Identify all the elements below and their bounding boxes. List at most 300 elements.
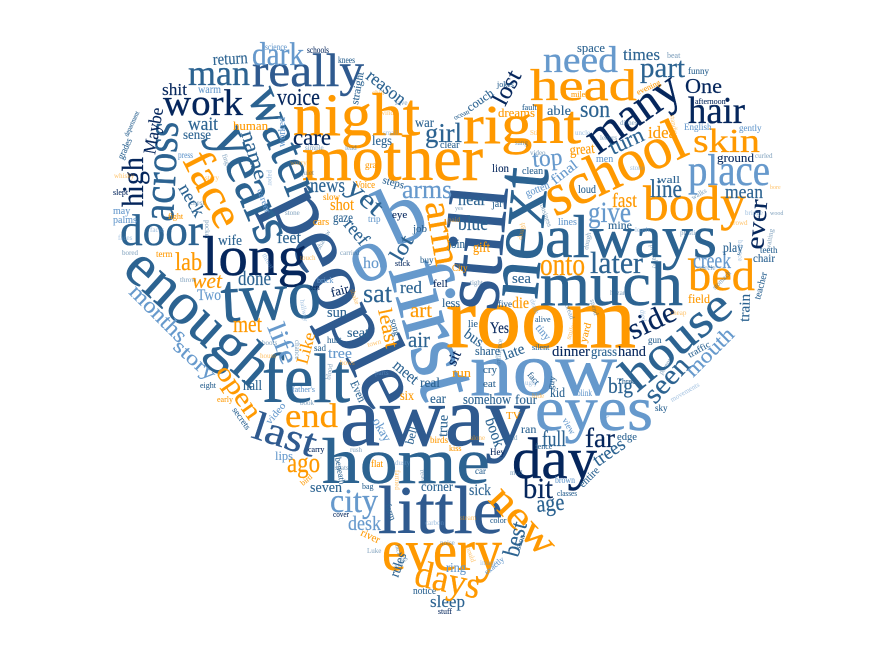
medium words: upper right: jokes <box>496 80 514 89</box>
medium words: upper right: play <box>723 241 743 256</box>
medium words: lower right: tiny <box>533 322 553 343</box>
medium words: lower right: exactly <box>483 555 506 577</box>
medium words: lower right: eat <box>483 378 496 390</box>
medium words: upper left: man <box>188 53 250 93</box>
small filler words: bore <box>770 185 781 191</box>
medium words: lower right: Hey <box>490 447 505 457</box>
small filler words: sang <box>515 139 528 147</box>
medium words: lower right: blink <box>577 388 592 398</box>
medium words: lower left: sleep <box>430 592 465 611</box>
medium words: lower right: best <box>499 519 533 560</box>
medium words: upper left: yet <box>341 173 391 222</box>
small filler words: wind <box>380 109 394 117</box>
small filler words: house <box>260 352 276 360</box>
small filler words: influence <box>494 339 504 365</box>
medium words: lower right: far <box>585 423 615 453</box>
medium words: upper left: hot <box>363 255 384 272</box>
medium words: upper right <box>425 40 778 322</box>
medium words: lower right: dinner <box>552 344 590 360</box>
medium words: upper right: mean <box>725 182 763 203</box>
medium words: upper right: skin <box>693 123 760 160</box>
medium words: upper right: gotten <box>524 179 552 200</box>
small filler words: dishes <box>620 119 638 127</box>
small filler words: movements <box>669 381 701 404</box>
small filler words: sheets <box>391 554 410 572</box>
medium words: lower left: life <box>261 318 304 368</box>
medium words: upper left: neck <box>175 180 209 220</box>
small filler words: dough <box>582 231 593 250</box>
small filler words: ugly <box>525 379 538 387</box>
small filler words: finger <box>220 153 234 172</box>
small filler words: bread <box>563 303 576 321</box>
medium words: upper right: One <box>685 74 722 98</box>
small filler words: town <box>366 337 383 349</box>
small filler words: cheap <box>670 309 687 317</box>
medium words: lower left: video <box>264 401 288 427</box>
medium words: lower right: sky <box>655 403 668 413</box>
medium words: upper right: son <box>580 97 610 123</box>
medium words: lower left: father's <box>292 385 315 394</box>
medium words: lower right: entire <box>577 465 602 490</box>
medium words: upper left: palms <box>113 215 137 226</box>
medium words: upper left: fair <box>329 281 351 300</box>
medium words: lower right: edge <box>617 431 637 443</box>
medium words: upper right: jar <box>491 199 503 210</box>
medium words: lower left: carry <box>308 445 324 454</box>
small filler words: uncle <box>575 129 590 137</box>
medium words: upper right: gift <box>473 240 491 256</box>
small filler words: circle <box>700 264 716 272</box>
medium words: lower left: birds <box>430 435 448 445</box>
medium words: upper right: wall <box>657 174 680 186</box>
medium words: upper left <box>113 37 469 385</box>
medium words: upper left: department <box>123 110 141 138</box>
medium words: upper right: field <box>688 291 710 306</box>
medium words: lower right: brown <box>555 475 575 485</box>
word: house: house <box>610 279 742 401</box>
word: first: first <box>369 248 499 408</box>
small filler words: shadow <box>315 228 333 251</box>
medium words: lower left: okay <box>369 415 395 445</box>
small filler words: stomach <box>711 269 733 291</box>
small filler words: carried <box>340 249 360 257</box>
medium words: lower right: run <box>452 365 472 380</box>
medium words: upper left: lot <box>384 230 418 266</box>
small filler words: chest <box>190 199 204 207</box>
medium words: upper left: gaze <box>333 211 353 226</box>
medium words: lower left: bag <box>362 482 374 491</box>
medium words: upper right: City <box>452 263 468 273</box>
medium words: upper left: door <box>120 206 203 255</box>
small filler words: paper <box>266 170 274 186</box>
medium words: lower right: fact <box>525 370 542 387</box>
medium words: upper right: blue <box>458 211 488 235</box>
word: right: right <box>463 94 581 155</box>
small filler words: video <box>530 149 546 157</box>
small filler words: steam <box>460 514 477 522</box>
small filler words: leash <box>635 226 650 234</box>
small filler words: death <box>528 298 541 315</box>
medium words: upper right: sea <box>512 271 531 287</box>
medium words: upper right: fast <box>612 190 637 212</box>
medium words: upper right: gently <box>739 123 762 133</box>
small filler words: boys <box>383 343 399 354</box>
medium words: upper right: lines <box>558 217 577 228</box>
medium words: upper left: fell <box>433 278 448 290</box>
word: now: now <box>470 328 617 412</box>
medium words: lower left: end <box>285 398 338 435</box>
small filler words: simple <box>305 144 324 152</box>
medium words: lower left: met <box>233 312 262 338</box>
small filler words: pocket <box>203 220 211 239</box>
medium words: upper left: Two <box>197 287 221 304</box>
medium words: lower left: stuff <box>438 607 452 616</box>
medium words: lower left: tree <box>328 346 352 362</box>
medium words: upper left: slow <box>323 192 341 202</box>
medium words: lower left: Like <box>293 330 319 366</box>
medium words: upper left: steps <box>381 174 406 192</box>
medium words: upper right: fault <box>522 103 537 112</box>
small filler words: chance <box>293 340 301 359</box>
small filler words: standing <box>668 114 680 139</box>
small filler words: worry <box>290 159 307 167</box>
medium words: upper left: ten <box>310 283 320 292</box>
medium words: lower right: classes <box>557 489 577 498</box>
small filler words: parts <box>375 369 389 377</box>
medium words: upper left: Voice <box>355 180 375 191</box>
word: day: day <box>512 426 597 491</box>
small filler words: chin <box>372 89 385 97</box>
word: water: water <box>236 77 335 206</box>
medium words: upper right: great <box>569 141 596 159</box>
medium words: upper left: stick <box>395 259 410 268</box>
medium words: lower right: alive <box>535 315 551 324</box>
medium words: lower left <box>200 305 484 616</box>
medium words: upper left: fight <box>168 212 184 221</box>
medium words: upper left: grad <box>365 160 381 170</box>
small filler words: hazard <box>610 289 629 297</box>
small filler words: yes <box>455 206 464 212</box>
small filler words: business <box>538 203 554 228</box>
small filler words: throw <box>180 276 197 284</box>
medium words: upper left: shit <box>162 80 187 99</box>
medium words: upper right: evening <box>635 78 662 97</box>
small filler words: save <box>395 99 407 107</box>
small filler words: farmed <box>393 470 401 490</box>
word: still: still <box>424 181 526 314</box>
word: much: much <box>540 251 683 319</box>
word: bed: bed <box>688 249 755 300</box>
medium words: lower right: late <box>501 341 527 364</box>
medium words: lower left: desk <box>348 513 381 535</box>
word: next: next <box>470 164 565 301</box>
medium words: lower left: river <box>359 527 382 546</box>
medium words: upper left: schools <box>307 45 329 55</box>
medium words: upper right: teacher <box>752 270 770 301</box>
medium words: upper right: onto <box>540 246 585 282</box>
medium words: upper right: teeth <box>760 245 778 255</box>
medium words: lower left: eight <box>200 381 217 390</box>
word: years: years <box>200 115 308 252</box>
small filler words: spend <box>588 298 600 317</box>
medium words: upper left: trip <box>368 214 381 224</box>
small filler words: crowd <box>730 219 748 227</box>
medium words: lower left: meet <box>389 357 422 388</box>
small filler words: letters <box>600 134 617 142</box>
small filler words: faces <box>150 226 165 234</box>
medium words: lower left: beneath <box>333 457 348 485</box>
small filler words: hide <box>532 392 544 400</box>
word: night: night <box>293 82 420 148</box>
medium words: upper right: join <box>447 236 465 251</box>
word: new: new <box>480 475 568 565</box>
small filler words: paid <box>448 216 461 224</box>
medium words: lower right <box>444 295 739 577</box>
medium words: lower right: seen <box>637 350 696 410</box>
small filler words: lack <box>393 543 404 557</box>
small filler words: throat <box>260 252 275 270</box>
medium words: upper right: couch <box>464 86 496 114</box>
medium words: lower left: corner <box>421 480 453 495</box>
word: many: many <box>574 60 690 164</box>
medium words: lower left: song <box>387 318 402 337</box>
medium words: upper left: worked <box>276 117 288 147</box>
medium words: upper right: train <box>737 293 754 322</box>
medium words: lower right: soon <box>513 533 527 551</box>
medium words: upper left: red <box>400 278 422 297</box>
small filler words: balance <box>736 240 744 261</box>
medium words: upper right: less <box>442 295 460 310</box>
medium words: lower right: big <box>608 373 633 398</box>
small filler words: rush <box>350 446 363 454</box>
small filler words: reach <box>418 469 429 486</box>
small filler words: small <box>383 129 398 137</box>
word: little: little <box>378 472 503 548</box>
medium words: lower left: ear <box>430 392 446 407</box>
medium words: upper right: men <box>596 154 613 165</box>
word: long: long <box>202 226 307 288</box>
medium words: upper right: hair <box>688 90 745 132</box>
medium words: upper left: return <box>212 48 249 69</box>
medium words: upper left: shot <box>330 195 354 214</box>
medium words: upper left: art <box>410 300 432 322</box>
small filler words: should <box>463 543 477 564</box>
word: face: face <box>173 142 253 236</box>
medium words: upper left: reef <box>339 215 374 250</box>
medium words: lower right: sick <box>469 482 491 499</box>
medium words: upper left: story <box>169 335 221 385</box>
medium words: upper right: able <box>547 104 571 119</box>
medium words: lower right: bit <box>523 472 554 505</box>
small filler words: faces <box>118 234 133 242</box>
medium words: lower left: cover <box>333 510 349 519</box>
medium words: upper left: high <box>115 157 150 207</box>
medium words: upper right: give <box>588 196 631 229</box>
medium words: upper left: months <box>124 279 193 347</box>
medium words: upper right: chair <box>753 251 775 265</box>
medium words: lower left: seat <box>347 326 369 341</box>
small filler words: dusty <box>395 459 411 467</box>
small filler words: mud <box>510 469 523 477</box>
medium words: lower left: notice <box>413 586 437 597</box>
small filler words: parents <box>657 355 675 376</box>
medium words: lower right: grass <box>591 345 617 360</box>
small filler words: blood <box>324 363 335 380</box>
medium words: lower right: cry <box>483 364 498 376</box>
medium words: lower right: gun <box>648 335 662 345</box>
medium words: upper left: career <box>255 187 273 214</box>
medium words: upper left: human <box>233 118 268 133</box>
medium words: upper left: wet <box>192 268 223 293</box>
medium words: lower right: color <box>490 516 507 525</box>
medium words: upper left: lab <box>175 249 202 276</box>
medium words: upper right: creek <box>693 248 731 273</box>
word: place: place <box>688 146 770 195</box>
medium words: upper left: arm <box>416 197 469 269</box>
small filler words: seats <box>335 464 349 472</box>
medium words: lower right: ran <box>521 422 536 436</box>
medium words: upper left: news <box>310 173 345 197</box>
medium words: upper right: dreams <box>498 105 535 120</box>
medium words: upper left: done <box>238 268 271 290</box>
medium words: lower right: sit <box>444 348 465 369</box>
medium words: lower left: secrets <box>230 405 253 432</box>
medium words: upper left: press <box>178 150 193 160</box>
medium words: lower left: seven <box>310 480 342 496</box>
medium words: upper left: reason <box>363 65 410 109</box>
medium words: upper right: near <box>458 192 487 209</box>
medium words: lower right: guy <box>545 375 557 390</box>
word: every: every <box>382 518 502 583</box>
medium words: lower left: city <box>330 483 378 520</box>
word: head: head <box>530 61 637 110</box>
medium words: upper left: brick <box>317 276 333 285</box>
medium words: upper left: Maybe <box>139 106 167 156</box>
medium words: upper left: work <box>163 83 244 124</box>
medium words: lower left: lips <box>275 448 293 463</box>
medium words: upper right: lost <box>487 66 527 110</box>
medium words: upper left: slept <box>113 188 129 197</box>
small filler words: bows <box>340 359 355 367</box>
small filler words: waiting <box>764 228 776 250</box>
medium words: lower right: full <box>542 426 566 451</box>
small filler words: Tell <box>598 407 611 420</box>
medium words: lower right: silent <box>532 343 550 352</box>
medium words: upper left: knees <box>338 55 355 65</box>
medium words: upper right: ocean <box>452 107 471 122</box>
medium words: upper left: science <box>265 42 287 52</box>
word: eyes: eyes <box>535 373 653 444</box>
medium words: lower left: rules <box>388 551 410 579</box>
medium words: upper right: ever <box>740 198 773 251</box>
medium words: upper left: wife <box>218 233 242 249</box>
medium words: lower left: days <box>411 553 484 608</box>
medium words: upper left: name <box>236 128 272 182</box>
medium words: lower right: share <box>475 343 500 358</box>
medium words: lower right: mouth <box>680 322 739 382</box>
medium words: lower right: TV <box>506 410 521 422</box>
medium words: upper left: grades <box>116 137 135 161</box>
medium words: upper right: lion <box>492 161 509 175</box>
small filler words: boots <box>262 339 277 347</box>
medium words: lower left: bell <box>402 424 421 446</box>
medium words: upper left: war <box>415 116 434 131</box>
word: enough: enough <box>112 233 287 399</box>
small filler words: whisky <box>114 172 135 180</box>
medium words: lower left: flat <box>371 459 383 470</box>
small filler words: lead <box>345 144 357 152</box>
medium words: lower right: book <box>481 416 507 450</box>
medium words: lower right: side <box>622 295 681 346</box>
small filler words: image <box>480 559 497 567</box>
word fragment: light blue b and o: b <box>362 162 441 265</box>
medium words: lower left: true <box>436 415 452 437</box>
medium words: upper right: loud <box>578 182 596 196</box>
medium words: lower left: real <box>420 376 440 391</box>
word: school: school <box>533 106 696 229</box>
medium words: upper right: miles <box>571 90 588 99</box>
medium words: lower left: hall <box>243 378 262 394</box>
medium words: upper left: care <box>293 125 331 150</box>
medium words: upper right: later <box>590 245 644 280</box>
medium words: upper right: idea <box>648 123 676 142</box>
word: felt: felt <box>262 341 351 418</box>
medium words: upper left: cars <box>313 217 329 228</box>
medium words: upper right: clear <box>440 140 460 151</box>
medium words: upper right: top <box>531 144 563 173</box>
medium words: lower right: car <box>475 466 486 476</box>
medium words: upper right: part <box>640 53 685 84</box>
medium words: upper right: ground <box>717 150 754 165</box>
small filler words: died <box>638 309 648 323</box>
small filler words: gold <box>505 434 518 442</box>
medium words: upper right: beat <box>667 51 681 60</box>
small filler words: carbon <box>425 519 445 527</box>
small filler words: plastic <box>680 229 698 237</box>
word: room: room <box>446 270 636 367</box>
medium words: lower right: Three <box>617 377 636 386</box>
medium words: lower left: ring <box>446 561 466 576</box>
medium words: lower left: farm <box>383 502 398 522</box>
medium words: lower left: hurt <box>327 335 342 345</box>
word: last: last <box>247 403 323 466</box>
medium words: lower right: fence <box>535 442 553 451</box>
medium words: upper left: legs <box>372 134 392 149</box>
small filler words: hallway <box>298 299 310 323</box>
medium words: upper left: sense <box>183 128 211 143</box>
medium words: lower right: four <box>515 393 537 408</box>
medium words: upper right: line <box>650 176 682 203</box>
medium words: upper left: voice <box>277 85 320 111</box>
small filler words: wood <box>770 211 783 217</box>
medium words: upper left: wait <box>188 114 219 135</box>
medium words: upper right: girl <box>425 118 462 148</box>
medium words: upper left: dark <box>252 37 304 73</box>
word: home: home <box>322 426 490 498</box>
small filler words: touch <box>300 254 316 262</box>
medium words: upper left: feet <box>277 228 301 247</box>
medium words: upper left: arms <box>402 175 452 204</box>
medium words: upper right: mine <box>608 218 632 232</box>
word: away: away <box>340 370 531 464</box>
small filler words: bridge <box>745 209 763 217</box>
word: people: people <box>253 170 440 423</box>
medium words: lower left: sad <box>314 343 326 353</box>
medium words: upper right: funny <box>688 66 709 76</box>
medium words: upper left: warm <box>198 82 222 96</box>
small filler words: alone <box>470 434 485 442</box>
medium words: lower right: traffic <box>686 339 712 360</box>
